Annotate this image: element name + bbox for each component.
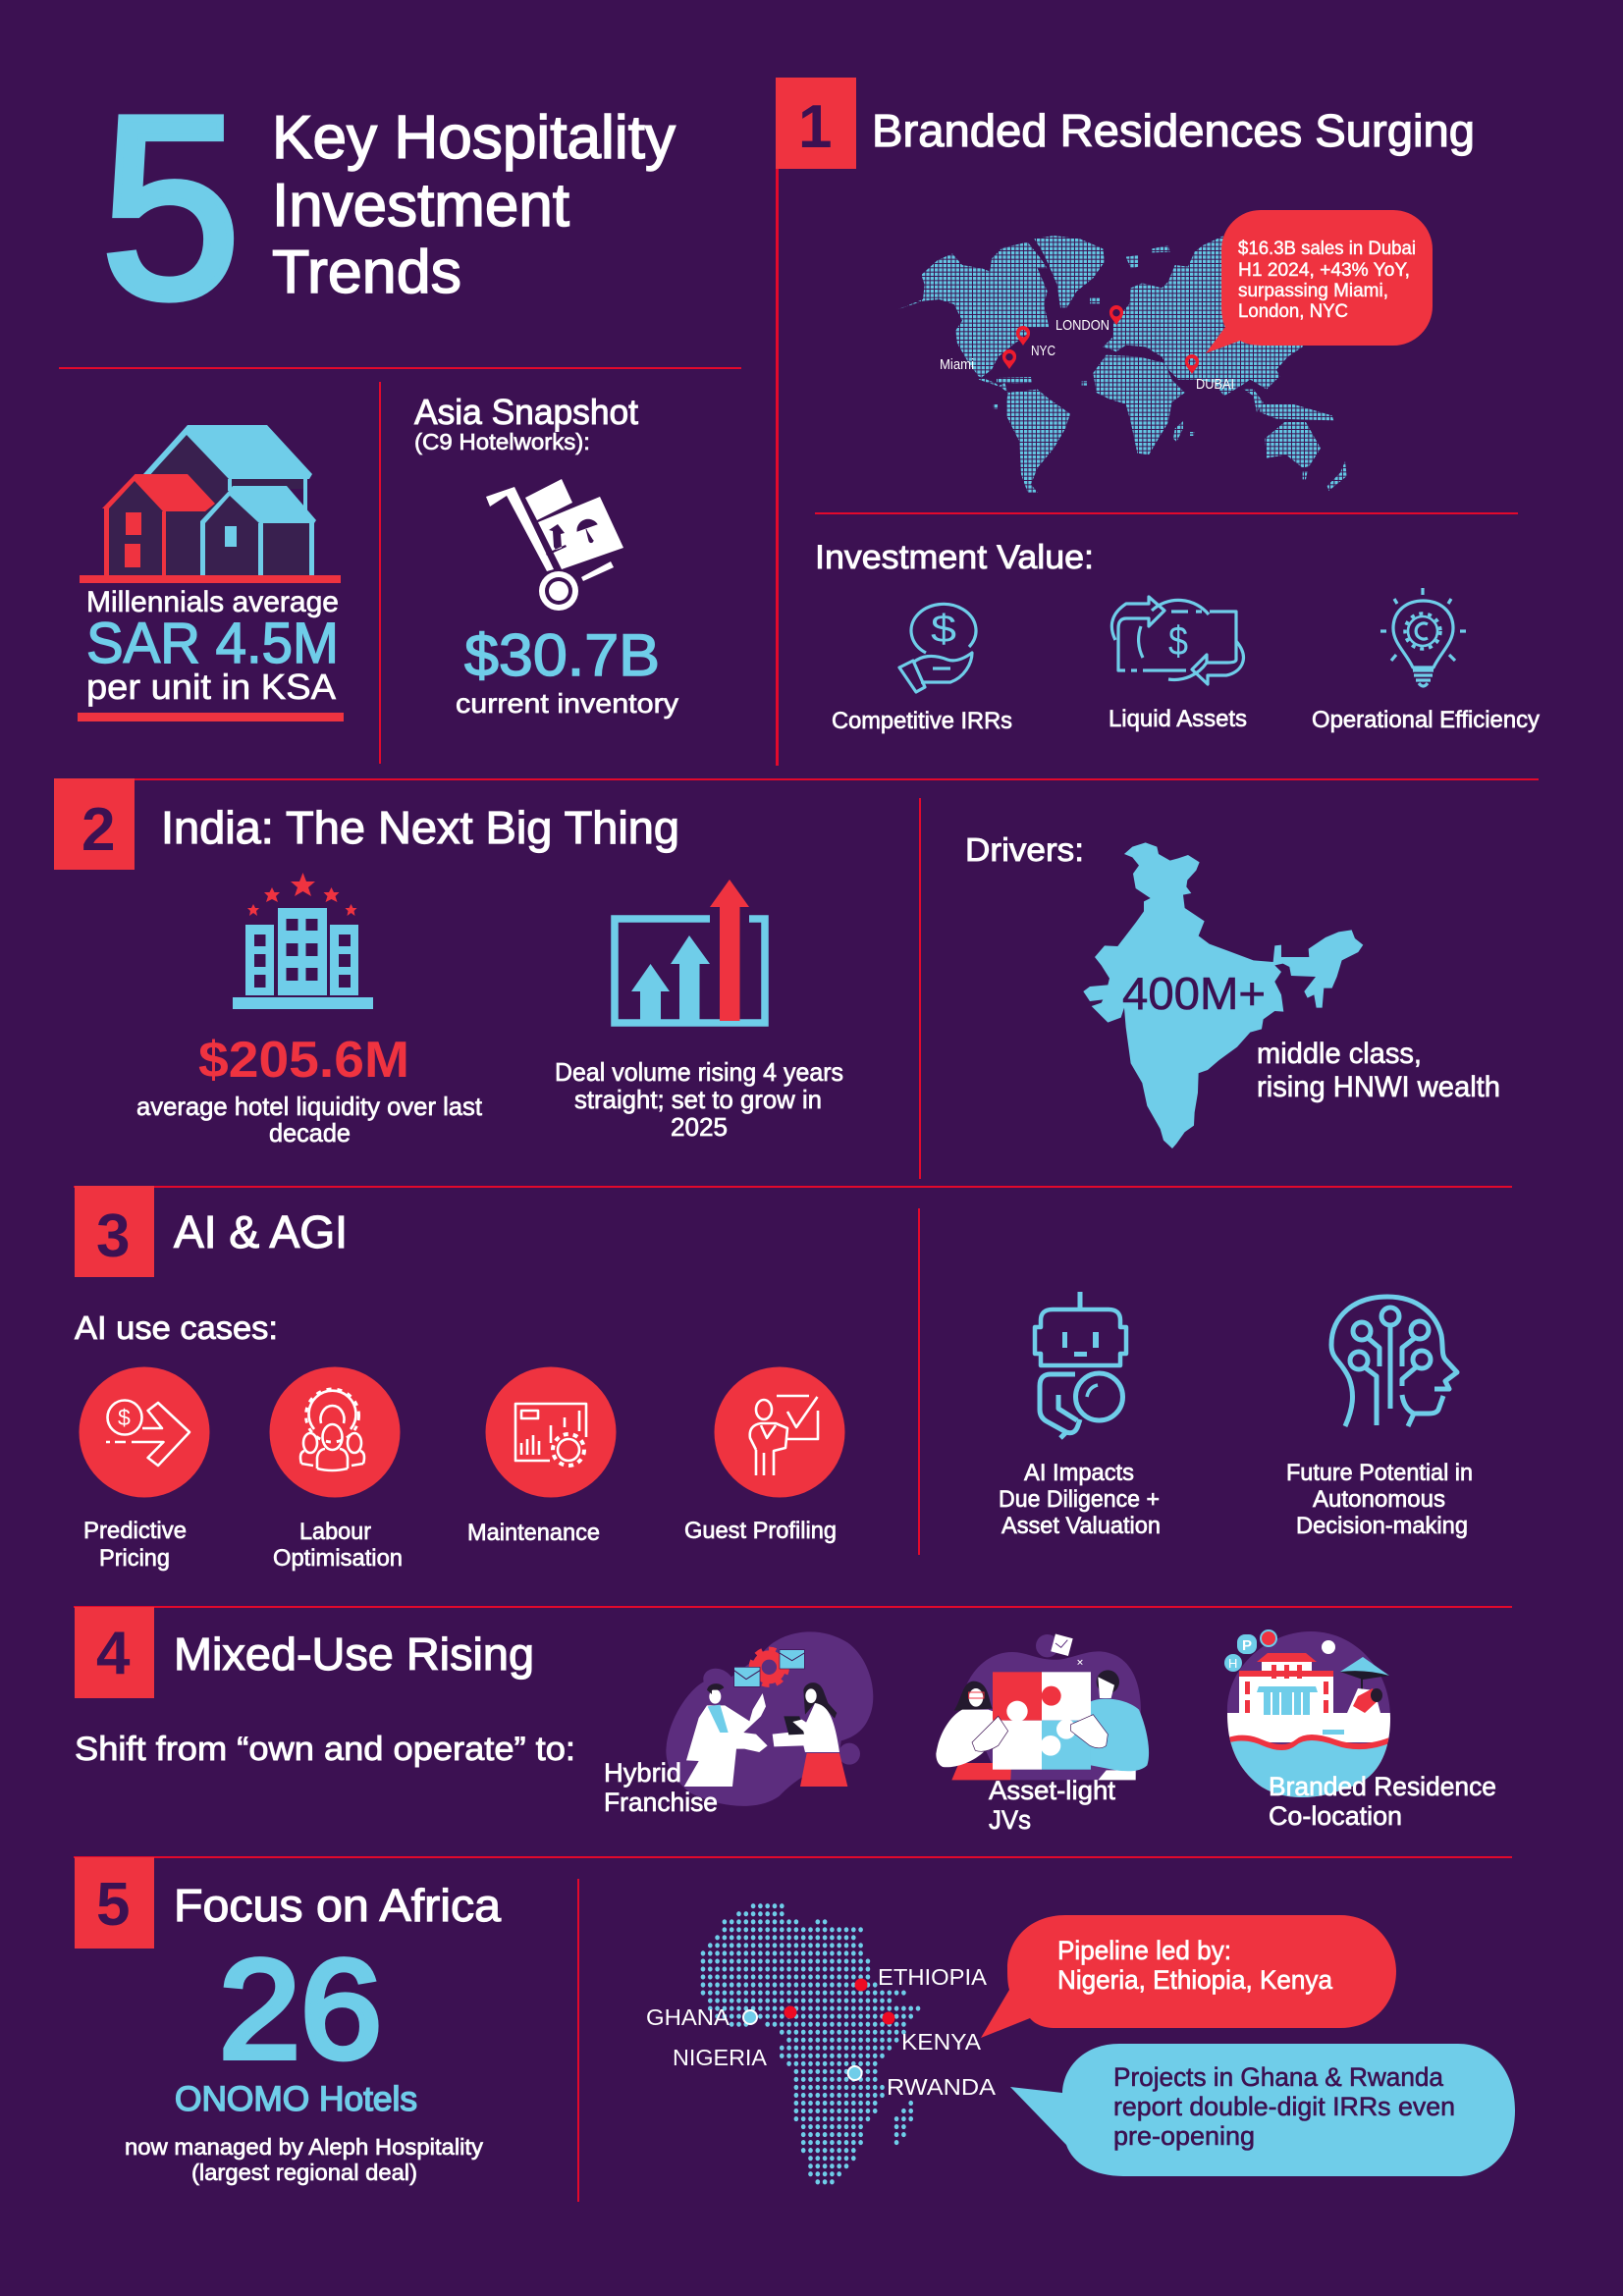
callout: pipeline: Pipeline led by:	[1057, 1936, 1231, 1965]
text: hotel liquidity	[136, 1092, 483, 1148]
callout: Dubai sales: surpassing Miami,	[1238, 281, 1388, 301]
stat: SAR 4.5M: SAR 4.5M	[86, 612, 339, 675]
chart: dotted Africa map	[703, 1906, 918, 2182]
text: deal volume: straight; set to grow in	[574, 1085, 822, 1114]
label: Competitive IRRs: Competitive IRRs	[832, 708, 1012, 734]
panel: millennials stat	[78, 425, 344, 721]
icon: maintenance	[485, 1366, 617, 1498]
text: AI impacts	[999, 1460, 1161, 1539]
map labels: LONDON	[1055, 318, 1109, 334]
illustration: branded residence resort: P	[1242, 1637, 1252, 1654]
callout: Ghana and Rwanda	[1010, 2044, 1515, 2176]
callout: Ghana and Rwanda: report double-digit IRRs even	[1113, 2092, 1455, 2121]
text: future potential	[1286, 1460, 1473, 1539]
icon: cash cycle	[1111, 597, 1243, 684]
heading: Drivers: Drivers:	[965, 831, 1084, 868]
title: Investment	[272, 172, 569, 240]
label: Guest Profiling: Guest Profiling	[684, 1518, 837, 1544]
chart: rising arrows	[615, 880, 765, 1023]
callout: Dubai sales: H1 2024, +43% YoY,	[1238, 260, 1410, 281]
map labels: NIGERIA	[673, 2045, 768, 2070]
map pins	[1002, 305, 1199, 374]
text: middle class: rising HNWI wealth	[1257, 1071, 1500, 1103]
stat: 400M+: 400M+	[1122, 968, 1266, 1019]
text: future potential: Autonomous	[1313, 1486, 1445, 1513]
text: AI impacts: AI Impacts	[1024, 1460, 1134, 1486]
icon: guest profiling	[715, 1366, 844, 1498]
map labels: NYC	[1031, 344, 1055, 359]
label: Predictive Pricing	[83, 1518, 187, 1572]
icon: hand truck with boxes	[486, 479, 623, 611]
callout: pipeline: Nigeria, Ethiopia, Kenya	[1057, 1965, 1333, 1995]
panel: section 3 AI	[75, 1186, 1473, 1572]
subheading: C9 Hotelworks: (C9 Hotelworks):	[414, 429, 590, 454]
text: managed by Aleph: now managed by Aleph Hospitality	[125, 2134, 484, 2160]
map labels: KENYA	[901, 2029, 982, 2055]
label: current inventory: current inventory	[456, 688, 678, 719]
label: Hybrid Franchise	[604, 1758, 718, 1817]
badge: 5	[75, 1857, 154, 1949]
text: managed by Aleph: (largest regional deal)	[191, 2160, 417, 2185]
heading: India The Next Big Thing: India: The Next Big Thing	[161, 802, 679, 853]
badge: 2	[54, 778, 135, 870]
label: Maintenance: Maintenance	[467, 1520, 600, 1546]
map labels: RWANDA	[887, 2074, 997, 2100]
label: Labour Optimisation: Optimisation	[273, 1545, 403, 1572]
bottom bar	[78, 713, 344, 721]
badge: 4	[75, 1607, 154, 1698]
text: AI impacts: Due Diligence +	[999, 1486, 1160, 1513]
illustration: branded residence resort	[1224, 1629, 1390, 1797]
title: Key Hospitality	[272, 104, 676, 172]
badge: 1	[776, 78, 856, 169]
panel: section 4 mixed use	[75, 1607, 1496, 1835]
badge: 3	[75, 1186, 154, 1277]
heading: Focus on Africa: Focus on Africa	[174, 1880, 501, 1931]
icon: light bulb with gear	[1380, 588, 1466, 686]
label: Asset-light JVs: JVs	[989, 1805, 1031, 1835]
heading: Mixed-Use Rising: Mixed-Use Rising	[174, 1629, 534, 1680]
callout: Ghana and Rwanda: Projects in Ghana & Rwanda	[1113, 2062, 1444, 2092]
label: Branded Residence Co-location	[1269, 1772, 1496, 1831]
badge: 4: 4	[96, 1620, 131, 1687]
text: deal volume: Deal volume rising 4 years	[555, 1057, 843, 1087]
callout: Ghana and Rwanda: pre-opening	[1113, 2121, 1255, 2151]
heading: Branded Residences Surging: Branded Residences Surging	[872, 105, 1475, 156]
panel: section 5 Africa	[75, 1857, 1515, 2185]
map labels: GHANA	[646, 2004, 730, 2030]
text: deal volume: 2025	[671, 1112, 728, 1142]
icon: predictive pricing: $	[118, 1405, 131, 1430]
callout: pipeline	[981, 1915, 1396, 2038]
map markers	[743, 1979, 895, 2080]
label: Predictive Pricing: Pricing	[99, 1545, 170, 1572]
text: hotel liquidity: decade	[269, 1118, 351, 1148]
badge: 5: 5	[96, 1871, 130, 1939]
label: Asset-light JVs: Asset-light	[989, 1776, 1115, 1805]
illustration: asset-light puzzle partners	[936, 1634, 1149, 1780]
badge: 2: 2	[81, 796, 115, 864]
callout: Dubai sales: London, NYC	[1238, 301, 1348, 322]
map labels	[646, 1964, 997, 2100]
stat: $205.6M: $205.6M	[198, 1032, 409, 1089]
text: deal volume	[555, 1057, 843, 1142]
icon: labour optimisation	[269, 1366, 401, 1498]
text: hotel liquidity: average hotel liquidity over last	[136, 1092, 483, 1121]
map labels: ETHIOPIA	[878, 1964, 988, 1990]
icon: robot with magnifier	[1035, 1292, 1126, 1438]
title	[101, 62, 676, 351]
heading: Asia Snapshot: Asia Snapshot	[414, 392, 638, 432]
icon: coin in hand: $	[931, 608, 956, 651]
ground bar	[80, 575, 341, 583]
text: AI impacts: Asset Valuation	[1001, 1513, 1161, 1539]
label: ONOMO Hotels: ONOMO Hotels	[175, 2080, 417, 2118]
text: middle class: middle class,	[1257, 1038, 1422, 1070]
callout: Dubai sales	[1206, 210, 1433, 353]
label: Hybrid Franchise: Hybrid	[604, 1758, 681, 1788]
label: Hybrid Franchise: Franchise	[604, 1788, 718, 1817]
chart: India map	[1083, 842, 1363, 1148]
map labels	[940, 318, 1234, 393]
heading: Investment Value: Investment Value:	[815, 539, 1094, 576]
icon: hotel with stars	[233, 873, 373, 1009]
map labels: Miami	[940, 357, 974, 373]
subheading: AI use cases: AI use cases:	[75, 1309, 278, 1346]
panel: section 2 India	[54, 778, 1500, 1148]
label: Branded Residence Co-location: Co-location	[1269, 1801, 1402, 1831]
icon: cash cycle: $	[1168, 617, 1188, 664]
text: future potential: Future Potential in	[1286, 1460, 1473, 1486]
text: middle class	[1257, 1038, 1500, 1103]
label: per unit in KSA: per unit in KSA	[86, 667, 336, 707]
icon: AI head circuit	[1331, 1297, 1457, 1426]
label: Labour Optimisation: Labour	[299, 1519, 371, 1545]
label: Asset-light JVs	[989, 1776, 1115, 1835]
text: shift from own and operate: Shift from “own and operate” to:	[75, 1731, 575, 1768]
label: Operational Efficiency: Operational Efficiency	[1312, 707, 1540, 733]
label: Branded Residence Co-location: Branded Residence	[1269, 1772, 1496, 1801]
icon: predictive pricing	[79, 1366, 210, 1498]
illustration: hybrid franchise handshake	[666, 1631, 873, 1806]
chart: dotted world map	[898, 236, 1347, 493]
map labels: DUBAI	[1196, 377, 1234, 393]
callout: Dubai sales: $16.3B sales in Dubai	[1238, 239, 1416, 259]
icon: coin in hand	[899, 604, 976, 692]
label: Labour Optimisation	[273, 1519, 403, 1572]
heading: AI & AGI: AI & AGI	[174, 1206, 348, 1257]
title: Trends	[272, 239, 461, 306]
label: Predictive Pricing: Predictive	[83, 1518, 187, 1544]
badge: 1: 1	[798, 93, 832, 161]
badge: 3: 3	[96, 1202, 130, 1270]
stat: 26: 26	[219, 1932, 382, 2088]
panel: section 1 branded residences	[776, 78, 1540, 734]
text: future potential: Decision-making	[1296, 1513, 1468, 1539]
label: Liquid Assets: Liquid Assets	[1109, 706, 1247, 732]
stat: $30.7B: $30.7B	[464, 622, 660, 688]
label: millennials average: Millennials average	[86, 586, 339, 618]
illustration: branded residence resort: H	[1228, 1656, 1237, 1671]
text: managed by Aleph	[125, 2134, 484, 2185]
panel: Asia snapshot	[414, 392, 678, 719]
title: 5	[101, 62, 241, 351]
icon: houses	[102, 425, 316, 575]
